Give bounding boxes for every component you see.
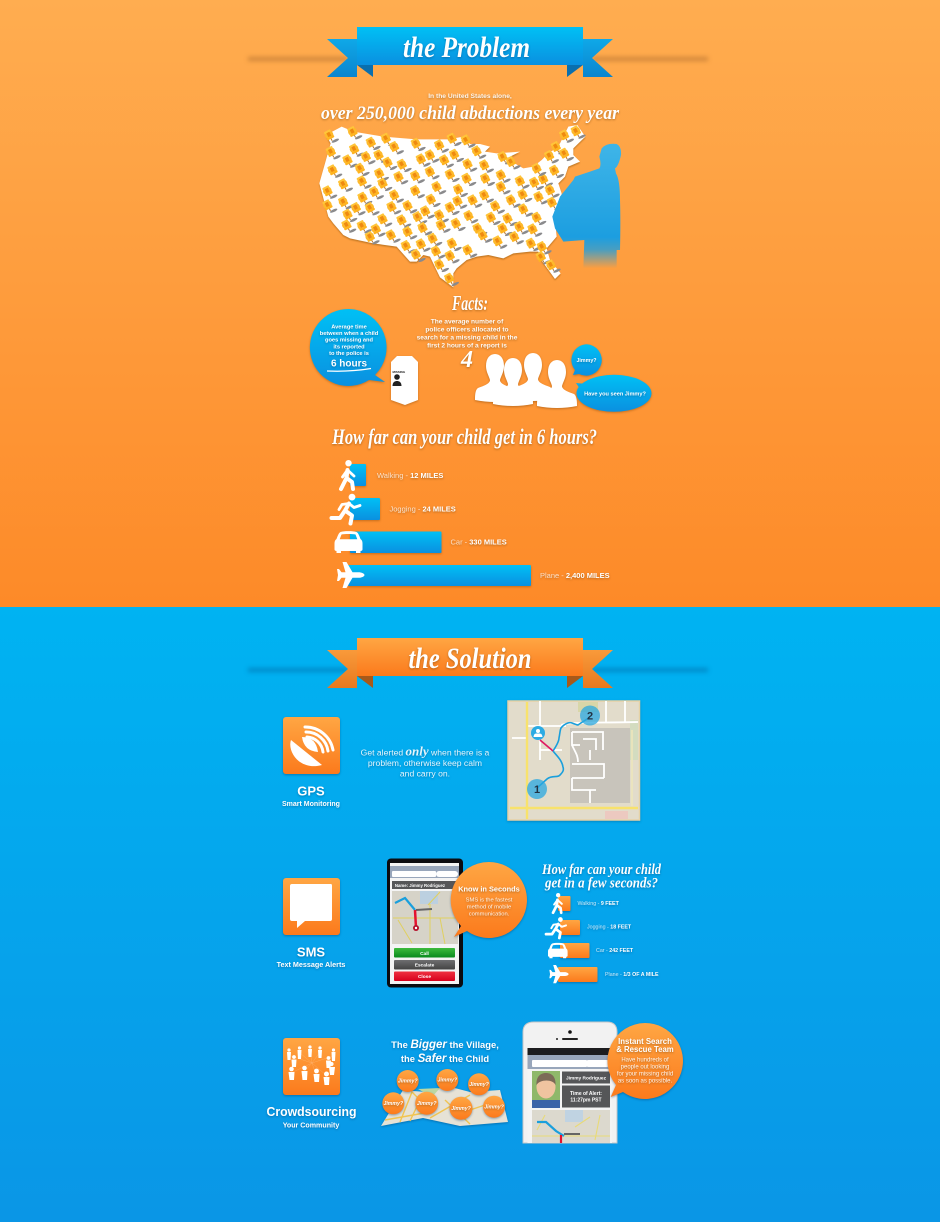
panel: the problem ribbon [248, 27, 708, 77]
phone: sms alert screen: Close [418, 974, 431, 980]
text: police officers fact: The average number of [431, 318, 504, 326]
callout: instant search and rescue team: & Rescue Team [616, 1045, 674, 1054]
map: gps tracking route: 1 [534, 784, 540, 796]
text: police officers fact [417, 318, 518, 350]
icon: crowdsourcing people [283, 1038, 340, 1095]
map: folded village map with jimmy bubbles: Jimmy? [484, 1104, 505, 1110]
heading: how far in six hours: How far can your child get in 6 hours? [331, 424, 597, 449]
callout: have you seen jimmy?: Have you seen Jimmy? [584, 392, 647, 398]
bar: jogging 24 miles: Jogging - 24 MILES [390, 504, 456, 514]
callout: six hours: between when a child [320, 331, 379, 337]
text: get alerted only [361, 744, 490, 778]
callout: six hours: its reported [333, 344, 365, 350]
bar: walking 9 feet: Walking - 9 FEET [578, 901, 620, 907]
text: police officers fact: search for a missing child in the [417, 334, 518, 342]
callout: know in seconds: communication. [469, 912, 510, 918]
label: crowdsourcing: Your Community [283, 1122, 339, 1130]
callout: know in seconds [451, 862, 527, 938]
callout: six hours [310, 309, 387, 386]
label: crowdsourcing [266, 1105, 356, 1130]
number four: 4 [460, 347, 473, 373]
phone: sms alert screen: Name: Jimmy Rodriguez [395, 883, 445, 888]
map: folded village map with jimmy bubbles: Jimmy? [398, 1078, 418, 1084]
bar: plane 1/3 of a mile: Plane - 1/3 OF A MILE [605, 972, 659, 978]
phone: sms alert screen: Call [420, 951, 429, 957]
map: folded village map with jimmy bubbles: Jimmy? [417, 1101, 437, 1107]
label: sms: SMS [297, 944, 325, 960]
callout: know in seconds: method of mobile [467, 904, 511, 910]
bar: plane 2,400 miles [337, 562, 610, 588]
icon: milk carton: MISSING [392, 370, 406, 374]
phone: rescue team screen: 11:27pm PST [570, 1098, 602, 1104]
map: folded village map with jimmy bubbles: Jimmy? [469, 1082, 490, 1088]
label: gps: Smart Monitoring [282, 801, 340, 808]
icon: police officers group [475, 353, 577, 408]
heading: how far in a few seconds: get in a few seconds? [544, 876, 658, 892]
intro text [321, 93, 620, 124]
heading: facts: Facts: [451, 291, 488, 315]
bar: walking 9 feet [553, 893, 620, 913]
orange background [0, 0, 940, 607]
phone: rescue team screen [523, 1022, 617, 1143]
heading: bigger the village: The Bigger the Village, [391, 1039, 499, 1051]
panel: the solution ribbon [248, 638, 708, 688]
callout: instant search and rescue team: Instant Search [618, 1037, 672, 1046]
callout: six hours: Average time [331, 324, 367, 330]
callout: instant search and rescue team: people out looking [621, 1064, 669, 1070]
bar: jogging 18 feet: Jogging - 18 FEET [587, 925, 632, 931]
text: police officers fact: police officers allocated to [425, 326, 509, 334]
bar: walking 12 miles [341, 460, 443, 489]
map: gps tracking route: 2 [587, 710, 593, 722]
text: get alerted only: and carry on. [400, 768, 450, 778]
callout: six hours: 6 hours [331, 358, 367, 370]
intro text: over 250,000 child abductions every year [321, 103, 620, 124]
bar: plane 1/3 of a mile [549, 965, 659, 983]
callout: six hours: goes missing and [325, 338, 374, 344]
icon: sms bubble [283, 878, 340, 935]
map: folded village map with jimmy bubbles: Jimmy? [451, 1106, 472, 1112]
callout: instant search and rescue team [607, 1023, 683, 1099]
heading: how far in a few seconds: How far can your child [541, 862, 661, 878]
map: folded village map with jimmy bubbles: Jimmy? [437, 1078, 458, 1084]
callout: jimmy?: Jimmy? [576, 358, 597, 364]
heading: bigger the village: the Safer the Child [401, 1053, 489, 1065]
map: folded village map with jimmy bubbles [381, 1069, 508, 1126]
callout: know in seconds: Know in Seconds [458, 884, 520, 894]
icon: milk carton [391, 356, 418, 405]
US map with pins [319, 125, 586, 287]
intro text: In the United States alone, [428, 93, 512, 100]
label: sms: Text Message Alerts [277, 960, 345, 969]
text: get alerted only: problem, otherwise keep calm [368, 758, 482, 768]
icon: gps dish [283, 717, 340, 774]
callout: six hours: to the police is [329, 351, 369, 357]
blue background [0, 607, 940, 1222]
bar: car 242 feet [548, 943, 634, 958]
label: gps [282, 784, 340, 808]
bar: car 242 feet: Car - 242 FEET [596, 948, 634, 954]
child silhouette [552, 144, 621, 268]
map: gps tracking route [508, 701, 640, 820]
bar: walking 12 miles: Walking - 12 MILES [377, 471, 443, 480]
text: get alerted only: Get alerted only when there is a [361, 744, 490, 758]
label: sms [277, 944, 345, 969]
bar: car 330 miles [334, 531, 507, 553]
label: gps: GPS [297, 784, 325, 798]
map: folded village map with jimmy bubbles: Jimmy? [383, 1101, 404, 1107]
heading: how far in a few seconds [541, 862, 661, 892]
phone: sms alert screen: Escalate [415, 962, 435, 968]
panel: the problem ribbon: the Problem [403, 31, 530, 64]
phone: sms alert screen [387, 858, 463, 988]
callout: have you seen jimmy? [576, 375, 652, 412]
callout: jimmy? [571, 344, 602, 376]
heading: bigger the village [391, 1039, 499, 1065]
callout: instant search and rescue team: as soon as possible. [618, 1078, 673, 1084]
phone: rescue team screen: Time of Alert: [570, 1091, 602, 1097]
text: police officers fact: first 2 hours of a report is [427, 342, 507, 350]
callout: instant search and rescue team: Have hundreds of [621, 1058, 669, 1064]
label: crowdsourcing: Crowdsourcing [266, 1105, 356, 1119]
bar: plane 2,400 miles: Plane - 2,400 MILES [540, 571, 610, 580]
callout: know in seconds: SMS is the fastest [466, 898, 513, 904]
phone: rescue team screen: Jimmy Rodriguez [566, 1076, 607, 1082]
panel: the solution ribbon: the Solution [408, 642, 532, 675]
bar: jogging 18 feet [546, 917, 632, 938]
bar: jogging 24 miles [332, 494, 456, 524]
bar: car 330 miles: Car - 330 MILES [450, 538, 507, 546]
callout: instant search and rescue team: for your missing child [617, 1072, 673, 1078]
